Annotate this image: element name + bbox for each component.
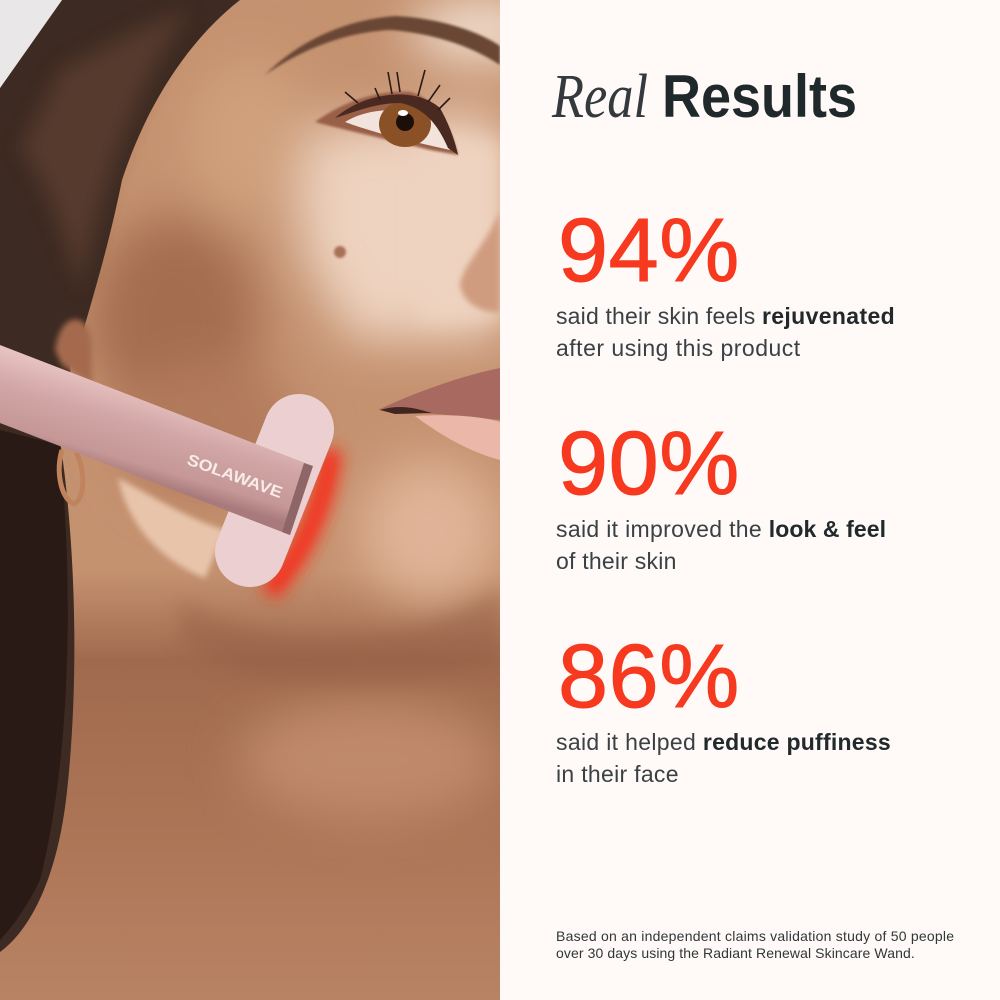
description — [556, 729, 891, 787]
description: said it helped reduce puffiness — [556, 729, 891, 755]
wand head — [250, 429, 299, 552]
stat: 90% — [556, 414, 886, 574]
footnote: over 30 days using the Radiant Renewal Skincare Wand. — [556, 945, 915, 961]
footnote — [556, 928, 954, 961]
description: after using this product — [556, 335, 801, 361]
skin base — [0, 0, 500, 1000]
title italic word: Real — [552, 63, 648, 131]
jaw shadow — [183, 596, 500, 672]
description — [556, 303, 895, 361]
description: said it improved the look & feel — [556, 516, 886, 542]
description — [556, 516, 886, 574]
mole — [334, 246, 346, 258]
title — [552, 63, 857, 131]
description: said their skin feels rejuvenated — [556, 303, 895, 329]
contact gel patch — [118, 478, 225, 578]
number: 94% — [558, 201, 740, 301]
stat: 94% — [556, 201, 895, 361]
number: 86% — [558, 627, 740, 727]
eye — [315, 70, 458, 155]
description: of their skin — [556, 548, 677, 574]
stat: 86% — [556, 627, 891, 787]
title bold word: Results — [662, 63, 857, 130]
background corner — [0, 0, 62, 88]
nose — [460, 210, 500, 312]
hair — [0, 0, 240, 952]
footnote: Based on an independent claims validation study of 50 people — [556, 928, 954, 944]
ear — [55, 319, 92, 385]
wand handle — [0, 345, 313, 535]
description: in their face — [556, 761, 679, 787]
lips — [378, 368, 500, 460]
photo: woman's face with light therapy wand — [0, 0, 500, 1000]
light cheek edge fill — [434, 134, 500, 328]
eyebrow — [265, 16, 500, 75]
number: 90% — [558, 414, 740, 514]
earring — [59, 450, 83, 504]
wand brand: SOLAWAVE — [185, 452, 285, 502]
red light glow — [268, 450, 332, 592]
